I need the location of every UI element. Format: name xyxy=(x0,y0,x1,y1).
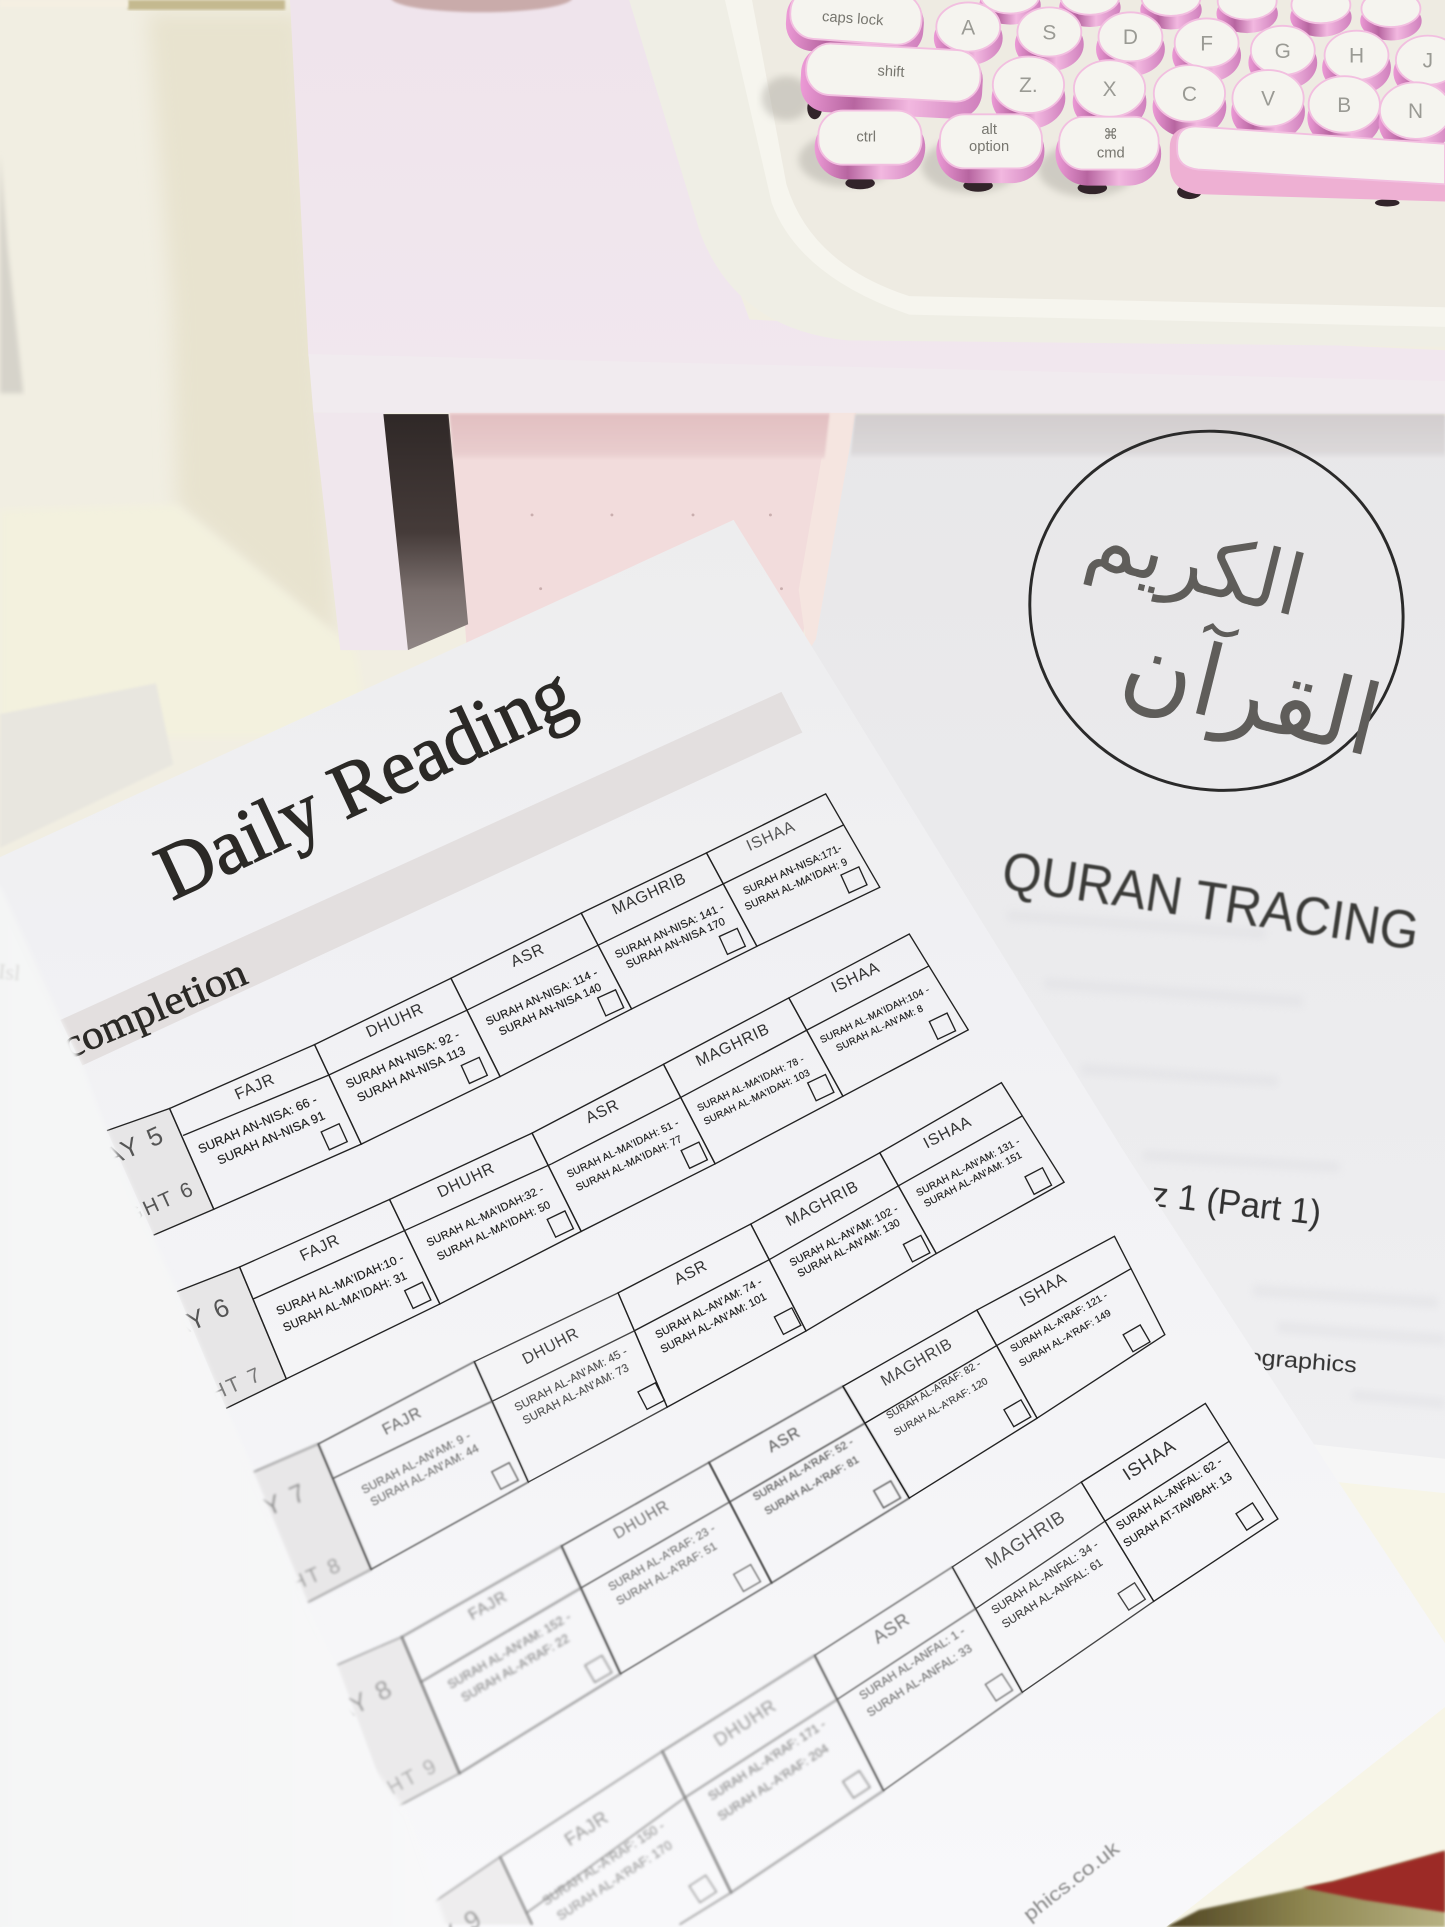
table row: day 8 xyxy=(311,1236,1165,1821)
cell: maghrib: SURAH AN-NISA 170 xyxy=(624,916,727,971)
cover under-desk shadow xyxy=(850,414,1445,458)
key: D: D xyxy=(1123,26,1138,49)
day cell: NIGHT 6 xyxy=(99,1177,199,1239)
cell: dhuhr xyxy=(562,1462,772,1674)
cell: dhuhr: SURAH AL-A'RAF: 171 - xyxy=(706,1717,828,1803)
emblem: circular calligraphy seal xyxy=(975,375,1445,846)
key: F xyxy=(1172,18,1241,82)
cell: fajr: FAJR xyxy=(560,1806,612,1850)
cell: fajr xyxy=(170,1045,361,1209)
desk: pink furniture xyxy=(290,0,1445,713)
cell: asr xyxy=(451,913,632,1077)
quran tracing cover sheet xyxy=(786,375,1445,1493)
cell: dhuhr: DHUHR xyxy=(520,1325,582,1368)
cell: maghrib: SURAH AL-MA'IDAH: 78 - xyxy=(696,1054,806,1114)
cell: dhuhr: DHUHR xyxy=(710,1695,780,1750)
cell: ishaa: SURAH AL-A'RAF: 121 - xyxy=(1009,1290,1110,1355)
subheading: completion: completion xyxy=(55,949,253,1068)
floor pale area xyxy=(0,505,369,737)
key: V: V xyxy=(1261,88,1275,111)
cell: fajr: FAJR xyxy=(297,1232,343,1265)
key: V xyxy=(1231,70,1305,143)
cell: ishaa: SURAH AT-TAWBAH: 13 xyxy=(1121,1471,1234,1550)
key: cmd: ⌘ xyxy=(1103,127,1118,143)
cell: asr xyxy=(815,1567,1022,1791)
panel under-desk shadow xyxy=(450,414,829,458)
day cell xyxy=(311,1637,460,1821)
cell: asr: SURAH AL-ANFAL: 33 xyxy=(864,1641,975,1720)
cell: maghrib: SURAH AL-MA'IDAH: 103 xyxy=(702,1067,812,1128)
calligraphy text second word: الكريم xyxy=(1078,488,1315,637)
bottom right cream surface xyxy=(1143,1462,1445,1927)
open book left page xyxy=(0,886,448,1927)
calligraphy text: القرآن xyxy=(1111,603,1392,780)
white sheet strip under cover xyxy=(1278,1440,1445,1493)
cell: ishaa: SURAH AL-A'RAF: 149 xyxy=(1017,1308,1113,1369)
key: H: H xyxy=(1349,45,1364,68)
cell: asr xyxy=(618,1224,806,1407)
cell: fajr: SURAH AN-NISA: 66 - xyxy=(196,1093,319,1156)
main sheet: daily reading xyxy=(0,520,1445,1927)
table row: day 5 xyxy=(81,794,880,1239)
cell: fajr xyxy=(240,1199,440,1379)
day cell: DAY 6 xyxy=(147,1292,236,1352)
cell: dhuhr: SURAH AN-NISA: 92 - xyxy=(344,1027,462,1091)
cell: asr xyxy=(709,1386,909,1583)
cell: maghrib: SURAH AL-A'RAF: 120 xyxy=(892,1376,990,1439)
key: ctrl xyxy=(815,111,925,179)
key: A: A xyxy=(961,16,975,39)
sheet paper xyxy=(0,520,1445,1927)
cell: maghrib: MAGHRIB xyxy=(981,1506,1069,1573)
cell: ishaa: ISHAA xyxy=(744,818,798,855)
cell: asr: ASR xyxy=(671,1257,710,1289)
cell: asr: SURAH AL-ANFAL: 1 - xyxy=(856,1624,968,1703)
cell: ishaa xyxy=(1081,1403,1278,1601)
key: X xyxy=(1073,60,1146,133)
cell: ishaa: SURAH AL-MA'IDAH:104 - xyxy=(819,985,931,1046)
key: F: F xyxy=(1200,32,1213,55)
cell: asr: SURAH AL-MA'IDAH: 77 xyxy=(574,1134,684,1194)
pink back panel xyxy=(450,413,831,651)
cell: dhuhr: SURAH AN-NISA 113 xyxy=(355,1043,468,1105)
cell: ishaa: SURAH AL-AN'AM: 131 - xyxy=(915,1136,1022,1199)
day cell xyxy=(430,1857,532,1927)
dark slot xyxy=(383,414,468,650)
cell: fajr: SURAH AL-A'RAF: 22 xyxy=(459,1631,572,1705)
cell: maghrib xyxy=(664,998,843,1164)
key: A xyxy=(934,2,1003,65)
key: cmd xyxy=(1055,117,1161,186)
cell: asr: SURAH AL-AN'AM: 74 - xyxy=(653,1276,764,1341)
day cell: DAY 5 xyxy=(81,1120,170,1181)
desk front edge xyxy=(308,354,1445,414)
cell: dhuhr: DHUHR xyxy=(364,1000,426,1041)
key: Z: Z. xyxy=(1019,74,1038,97)
keyboard outer shell xyxy=(629,0,1445,347)
cell: fajr: SURAH AL-AN'AM: 152 - xyxy=(445,1610,573,1692)
day cell: DAY 7 xyxy=(224,1478,312,1538)
cell: maghrib: MAGHRIB xyxy=(610,870,689,919)
cell: dhuhr xyxy=(315,978,500,1144)
cell: fajr: SURAH AL-MA'IDAH: 31 xyxy=(281,1268,409,1335)
keyboard tray xyxy=(752,0,1445,307)
key: H xyxy=(1322,31,1391,95)
key: G xyxy=(1248,26,1317,90)
cell: asr: ASR xyxy=(765,1424,804,1456)
cell: fajr: SURAH AL-AN'AM: 9 - xyxy=(359,1429,473,1497)
key: cmd: cmd xyxy=(1097,145,1125,161)
cell: ishaa: SURAH AL-ANFAL: 62 - xyxy=(1114,1456,1225,1533)
cell: dhuhr: SURAH AL-MA'IDAH: 50 xyxy=(435,1199,553,1263)
cell: fajr: SURAH AL-A'RAF: 150 - xyxy=(539,1818,667,1908)
cell: fajr: FAJR xyxy=(466,1588,510,1624)
right pink leg xyxy=(799,413,856,713)
cell: maghrib: SURAH AL-AN'AM: 102 - xyxy=(788,1203,901,1269)
cover subtitle: z 1 (Part 1) xyxy=(1149,1174,1323,1233)
cell: asr xyxy=(532,1064,715,1231)
key: S xyxy=(1015,7,1084,71)
show-through faint lines xyxy=(1008,916,1445,1403)
cell: ishaa: SURAH AN-NISA:171- xyxy=(742,843,844,898)
cell: fajr: SURAH AN-NISA 91 xyxy=(215,1108,327,1168)
key: shift xyxy=(799,42,984,120)
cell: fajr xyxy=(402,1546,621,1773)
finger at top edge xyxy=(391,0,573,12)
cell: asr: ASR xyxy=(508,941,547,971)
left wall object shadow xyxy=(0,154,23,393)
cell: dhuhr: SURAH AL-AN'AM: 45 - xyxy=(513,1346,630,1414)
key: space bar xyxy=(1170,127,1445,202)
cell: asr: SURAH AN-NISA: 114 - xyxy=(484,967,600,1028)
cell: ishaa: SURAH AL-AN'AM: 8 xyxy=(835,1003,926,1054)
wall tan shaded column xyxy=(147,12,338,643)
key: alt option: option xyxy=(969,139,1009,155)
cell: ishaa: SURAH AL-AN'AM: 151 xyxy=(922,1150,1024,1210)
day cell: NIGHT 7 xyxy=(166,1362,266,1424)
cell: ishaa: SURAH AL-MA'IDAH: 9 xyxy=(743,857,850,913)
key: X: X xyxy=(1103,78,1117,101)
cell: asr: ASR xyxy=(583,1097,622,1127)
cell: dhuhr: DHUHR xyxy=(435,1160,498,1202)
cell: ishaa xyxy=(789,934,968,1096)
cell: fajr: FAJR xyxy=(232,1071,278,1104)
cell: ishaa xyxy=(707,794,880,946)
day cell xyxy=(81,1109,214,1239)
keyboard xyxy=(629,0,1445,347)
key: J: J xyxy=(1423,50,1433,73)
cell: maghrib: SURAH AL-AN'AM: 130 xyxy=(796,1217,902,1280)
cell: ishaa xyxy=(880,1083,1064,1254)
cover credit: ographics xyxy=(1247,1344,1358,1378)
key: N: N xyxy=(1408,100,1423,123)
cell: maghrib: MAGHRIB xyxy=(783,1178,862,1230)
day cell: NIGHT 8 xyxy=(246,1553,346,1614)
rug red corner xyxy=(1302,1851,1445,1912)
key: shift: shift xyxy=(877,63,905,81)
cell: fajr xyxy=(318,1362,528,1569)
cell: maghrib xyxy=(843,1310,1037,1498)
cell: dhuhr: SURAH AL-AN'AM: 73 xyxy=(521,1362,631,1427)
table row: day 9 xyxy=(430,1403,1278,1927)
key: C: C xyxy=(1182,83,1197,106)
cell: ishaa: ISHAA xyxy=(829,959,883,997)
cell: fajr xyxy=(500,1751,731,1925)
key: B xyxy=(1307,76,1381,149)
cell: asr: ASR xyxy=(868,1608,914,1648)
key: B: B xyxy=(1337,94,1351,117)
cell: dhuhr xyxy=(662,1655,883,1893)
cover title: QURAN TRACING xyxy=(998,841,1423,962)
key: caps lock xyxy=(784,0,926,59)
day cell: DAY 8 xyxy=(311,1674,398,1738)
day cell xyxy=(224,1444,371,1614)
cell: ishaa: ISHAA xyxy=(1017,1270,1070,1310)
cell: maghrib xyxy=(581,853,757,1009)
cell: maghrib: MAGHRIB xyxy=(878,1335,956,1390)
table row: day 6 xyxy=(147,934,968,1424)
cell: fajr: SURAH AL-A'RAF: 170 xyxy=(554,1837,675,1923)
cell: asr: SURAH AL-A'RAF: 52 - xyxy=(751,1436,856,1503)
panel peg holes xyxy=(522,443,783,590)
key: C xyxy=(1153,65,1226,138)
table row: day 7 xyxy=(224,1083,1064,1614)
cell: maghrib xyxy=(952,1482,1154,1692)
cell: fajr: FAJR xyxy=(380,1404,425,1439)
cell: ishaa xyxy=(977,1236,1165,1418)
key shadows xyxy=(762,76,1137,197)
cell: dhuhr: SURAH AL-A'RAF: 23 - xyxy=(607,1523,718,1594)
cell: asr: SURAH AN-NISA 140 xyxy=(497,981,604,1038)
heading: Daily Reading: Daily Reading xyxy=(143,649,586,917)
cell: fajr: SURAH AL-MA'IDAH:10 - xyxy=(274,1250,406,1318)
desk top surface xyxy=(290,0,1445,383)
cell: maghrib: SURAH AL-A'RAF: 82 - xyxy=(885,1359,983,1422)
keyboard rim xyxy=(725,0,1445,327)
footer web address: phics.co.uk xyxy=(1019,1837,1124,1926)
cell: dhuhr: SURAH AL-A'RAF: 51 xyxy=(615,1540,719,1608)
key: J xyxy=(1393,36,1445,100)
cell: maghrib: SURAH AL-ANFAL: 34 - xyxy=(990,1539,1101,1617)
cell: fajr: SURAH AL-AN'AM: 44 xyxy=(368,1442,481,1509)
cell: maghrib xyxy=(751,1153,936,1331)
top dark strip xyxy=(128,0,285,10)
key: S: S xyxy=(1042,21,1056,44)
number row keys xyxy=(979,0,1422,41)
cell: asr: SURAH AL-A'RAF: 81 xyxy=(763,1454,861,1518)
key: G: G xyxy=(1275,40,1291,63)
day cell: NIGHT 9 xyxy=(344,1754,442,1821)
cell: asr: SURAH AL-AN'AM: 101 xyxy=(659,1291,769,1356)
key: alt option xyxy=(936,114,1044,183)
paper behind reading sheet xyxy=(0,683,173,848)
cell: maghrib: SURAH AN-NISA: 141 - xyxy=(613,901,726,961)
cell: dhuhr: SURAH AL-MA'IDAH:32 - xyxy=(425,1183,546,1249)
cell: ishaa: ISHAA xyxy=(1119,1435,1179,1484)
day cell xyxy=(147,1267,286,1424)
desk left leg xyxy=(313,413,408,650)
cell: dhuhr: SURAH AL-A'RAF: 204 xyxy=(715,1741,831,1823)
cell: dhuhr xyxy=(474,1293,667,1482)
heading band xyxy=(60,692,802,1066)
cell: ishaa: ISHAA xyxy=(921,1113,975,1152)
key: alt option: alt xyxy=(981,122,997,138)
cell: maghrib: SURAH AL-ANFAL: 61 xyxy=(1000,1557,1105,1631)
key feet xyxy=(807,97,1400,206)
rug olive area xyxy=(1166,1851,1445,1927)
cell: dhuhr: DHUHR xyxy=(611,1497,672,1543)
key: N xyxy=(1379,82,1445,154)
key: D xyxy=(1096,12,1165,76)
key: Z xyxy=(992,57,1065,129)
top left pale strip xyxy=(0,0,128,7)
key: caps lock: caps lock xyxy=(821,9,885,29)
cell: dhuhr xyxy=(390,1133,581,1304)
key: ctrl: ctrl xyxy=(856,129,876,145)
cell: asr: SURAH AL-MA'IDAH: 51 - xyxy=(565,1118,681,1181)
cell: maghrib: MAGHRIB xyxy=(693,1021,772,1070)
cover sheet paper xyxy=(786,417,1445,1459)
